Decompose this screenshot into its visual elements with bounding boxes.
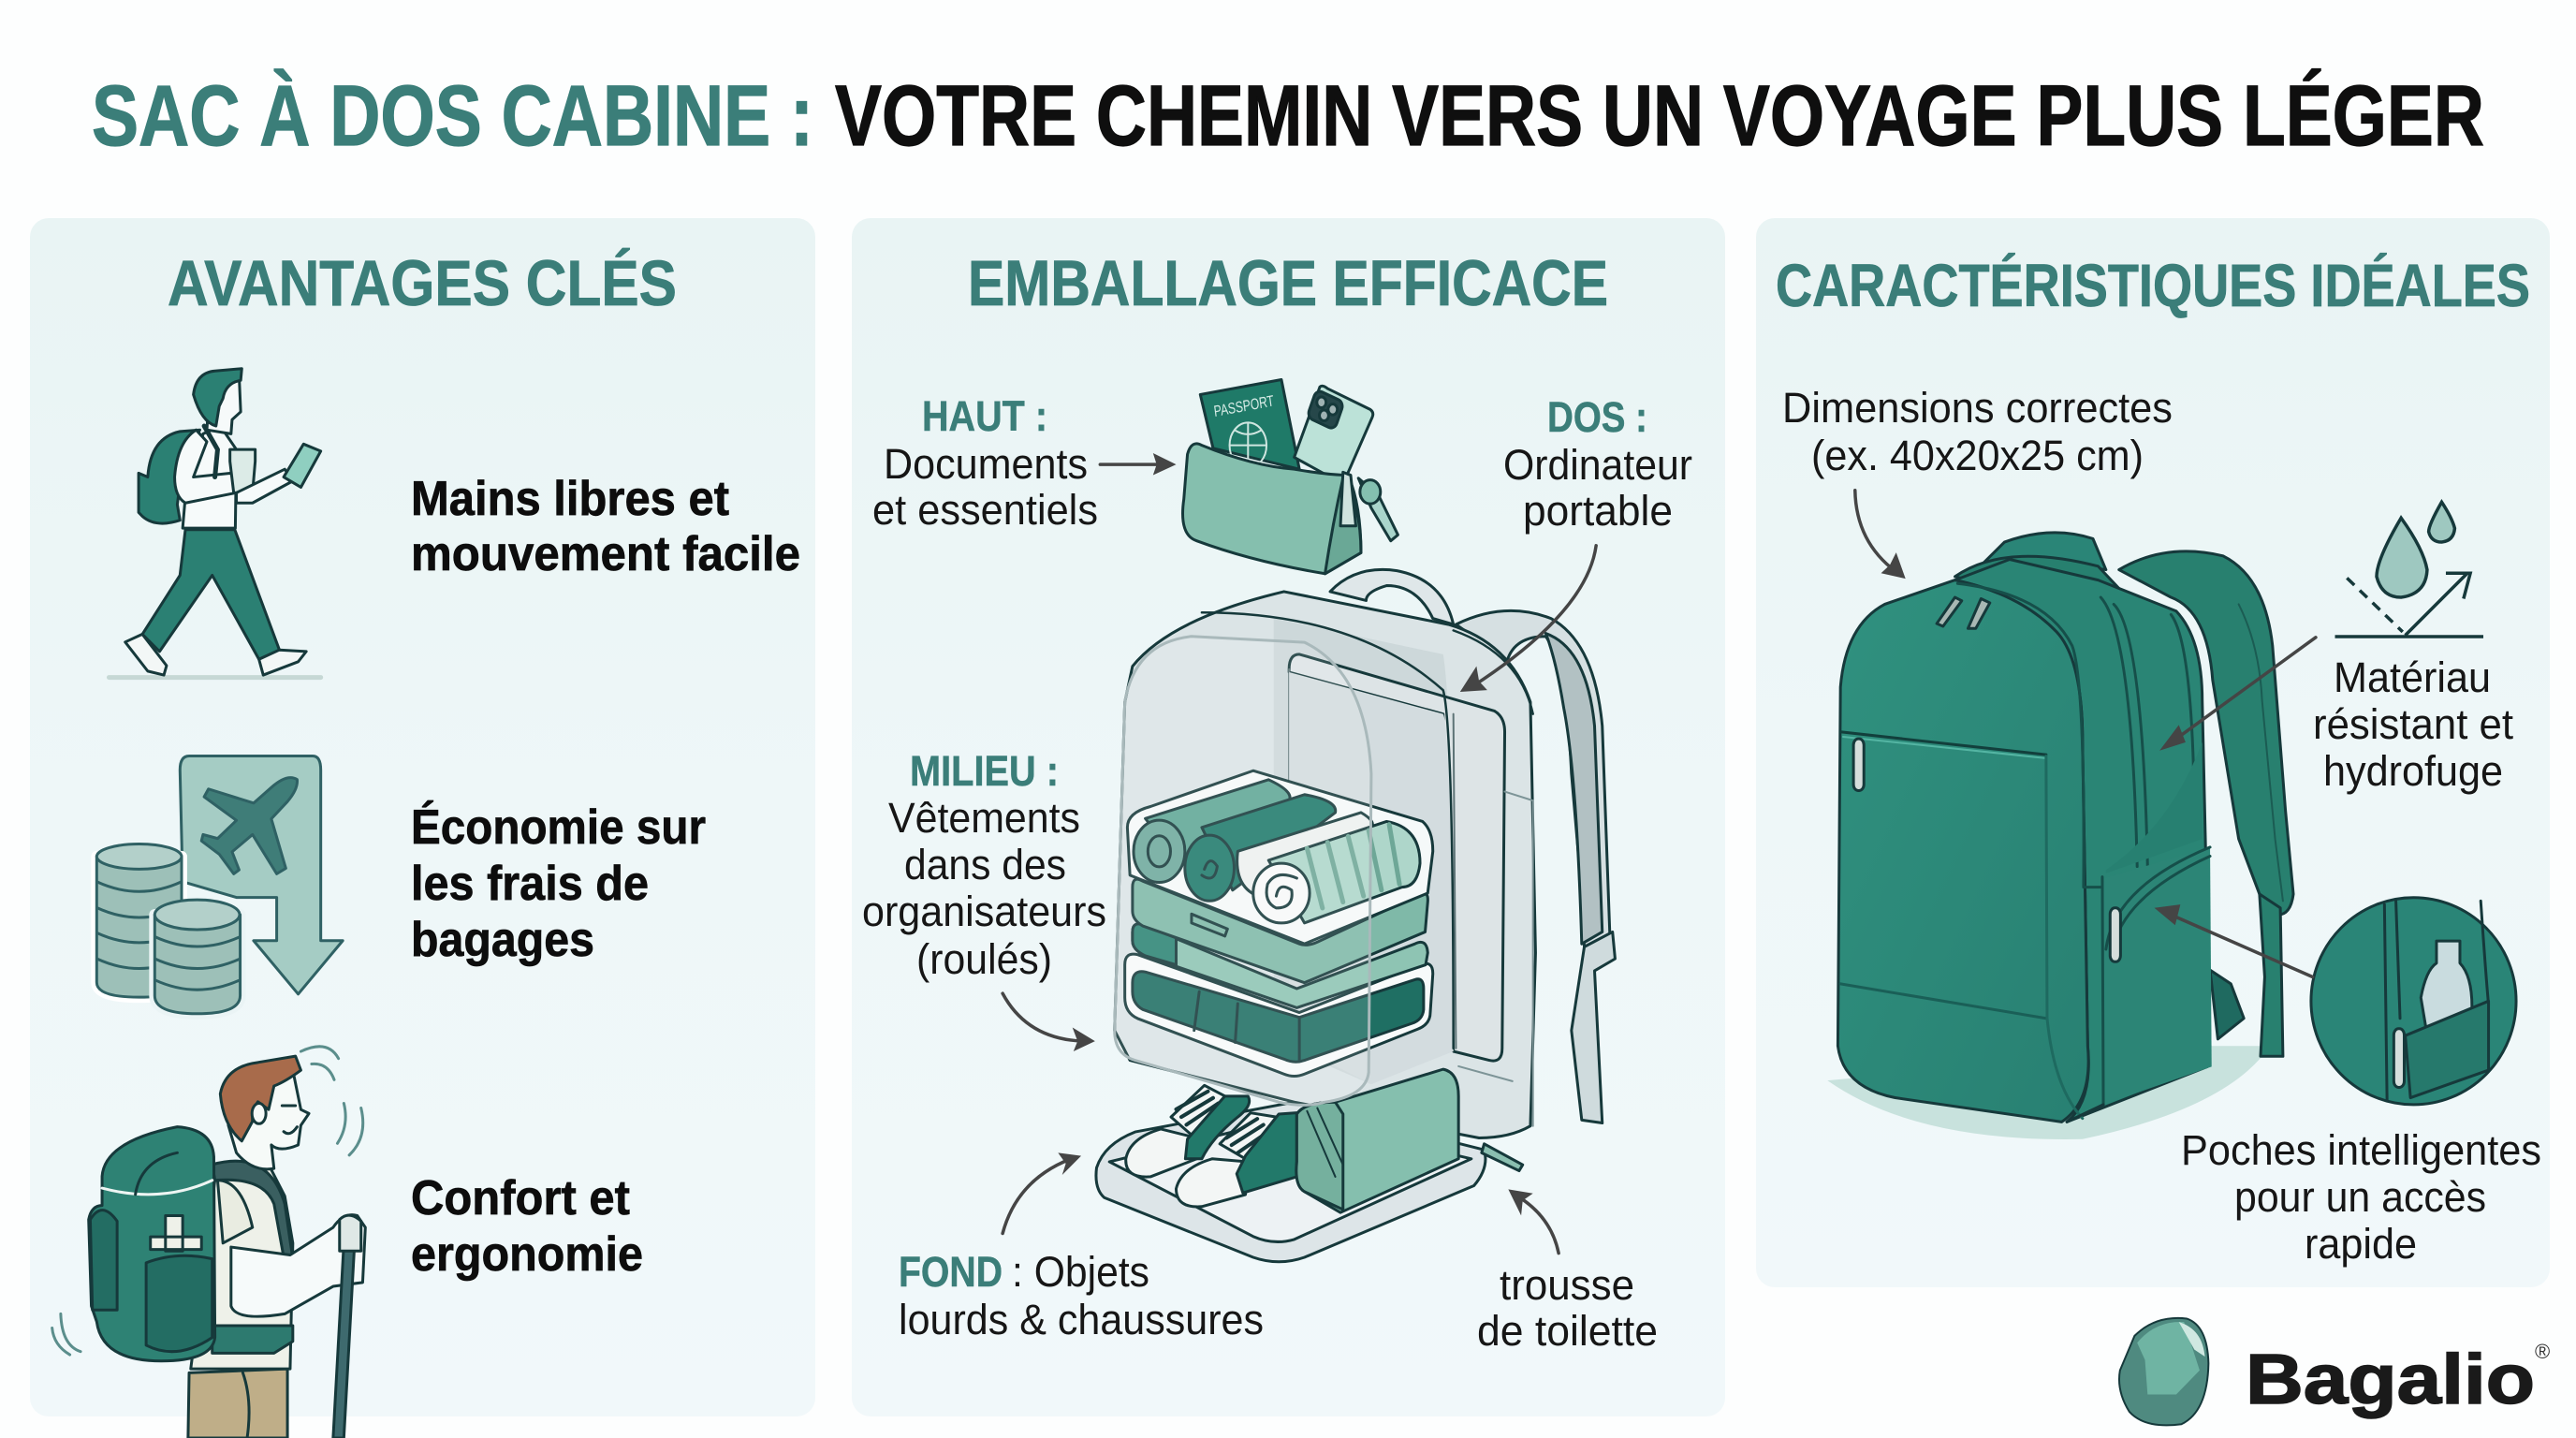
panel: avantages clés [30, 218, 815, 1438]
label: dimensions: Dimensions correctes [1782, 384, 2173, 432]
shoes [1126, 1129, 1196, 1177]
logo mark [2119, 1318, 2208, 1425]
heading: emballage efficace: EMBALLAGE EFFICACE [968, 247, 1608, 319]
text: économie: bagages [411, 913, 594, 967]
label: milieu: (roulés) [916, 935, 1052, 983]
label: milieu: dans des [904, 841, 1066, 888]
icon: savings coins and plane [96, 756, 343, 1014]
label: trousse de toilette: trousse [1500, 1261, 1634, 1309]
illustration: teal cabin backpack [1827, 533, 2293, 1139]
toiletry pouch [1296, 1069, 1458, 1212]
label: dos: portable [1523, 487, 1673, 535]
icon: top pouch with passport, phone and keys: PASSPORT [1213, 392, 1276, 420]
heading: avantages clés: AVANTAGES CLÉS [168, 247, 677, 319]
icon: water repellent [2335, 502, 2483, 637]
arrow: dos [1460, 546, 1596, 692]
label: trousse de toilette [1477, 1261, 1658, 1355]
body shell [1115, 592, 1535, 1137]
label: poches: pour un accès [2234, 1173, 2486, 1221]
logo: Bagalio [2119, 1318, 2550, 1425]
logo wordmark: Bagalio [2246, 1340, 2535, 1418]
title: SAC À DOS CABINE : [92, 68, 813, 164]
arrow: poches [2155, 904, 2313, 977]
label: haut: HAUT : [922, 392, 1047, 440]
label: milieu [862, 747, 1106, 983]
rolled clothes [1146, 780, 1290, 863]
label: poches: Poches intelligentes [2181, 1126, 2541, 1174]
icon: top pouch with passport, phone and keys [1183, 380, 1398, 574]
icon: hiker with ergonomic pack [52, 1047, 365, 1438]
label: dimensions [1782, 384, 2173, 479]
organizer stack [1125, 954, 1433, 1076]
icon: walking traveller [110, 369, 321, 678]
arrow: haut [1100, 453, 1177, 476]
text: mains libres [411, 472, 800, 581]
label: dos [1503, 393, 1692, 535]
label: fond: FOND [899, 1248, 1003, 1296]
label: haut: et essentiels [872, 486, 1098, 534]
label: dos: Ordinateur [1503, 441, 1692, 489]
label: haut: Documents [884, 440, 1088, 488]
label: matériau: Matériau [2334, 653, 2491, 701]
text: économie [411, 800, 706, 967]
text: mains libres: mouvement facile [411, 527, 800, 581]
label: fond: : Objets [1012, 1248, 1149, 1296]
arrow: fond [1003, 1152, 1081, 1234]
translucent front flap [1115, 637, 1371, 1105]
text: confort [411, 1171, 643, 1282]
label: dimensions: (ex. 40x20x25 cm) [1811, 432, 2144, 479]
label: dos: DOS : [1547, 393, 1647, 441]
backpack handle and shoulder strap [1330, 569, 1454, 624]
arrow: dimensions [1855, 491, 1906, 579]
label: milieu: MILIEU : [910, 747, 1059, 795]
label: fond: lourds & chaussures [899, 1296, 1264, 1343]
label: trousse de toilette: de toilette [1477, 1307, 1658, 1355]
label: matériau: hydrofuge [2323, 747, 2503, 795]
text: mains libres: Mains libres et [411, 472, 729, 526]
callout: side pocket close-up [2311, 898, 2516, 1105]
label: poches [2181, 1126, 2541, 1268]
label: milieu: Vêtements [888, 794, 1080, 842]
title [92, 67, 2484, 164]
text: confort: ergonomie [411, 1227, 643, 1282]
text: économie: Économie sur [411, 800, 706, 855]
arrow: milieu [1003, 993, 1095, 1051]
arrow: matériau [2159, 638, 2316, 751]
text: économie: les frais de [411, 857, 649, 911]
label: matériau: résistant et [2313, 700, 2513, 748]
panel: emballage efficace [852, 218, 1725, 1416]
tray base [1096, 1102, 1486, 1262]
label: matériau [2313, 653, 2513, 795]
label: poches: rapide [2305, 1220, 2417, 1268]
panel: caractéristiques idéales [1756, 218, 2550, 1287]
illustration: open packed backpack [1096, 380, 1615, 1262]
label: fond [899, 1248, 1264, 1343]
label: milieu: organisateurs [862, 888, 1106, 935]
label: haut [872, 392, 1098, 534]
text: confort: Confort et [411, 1171, 630, 1225]
registered mark: ® [2535, 1340, 2550, 1363]
arrow: trousse [1508, 1189, 1559, 1254]
